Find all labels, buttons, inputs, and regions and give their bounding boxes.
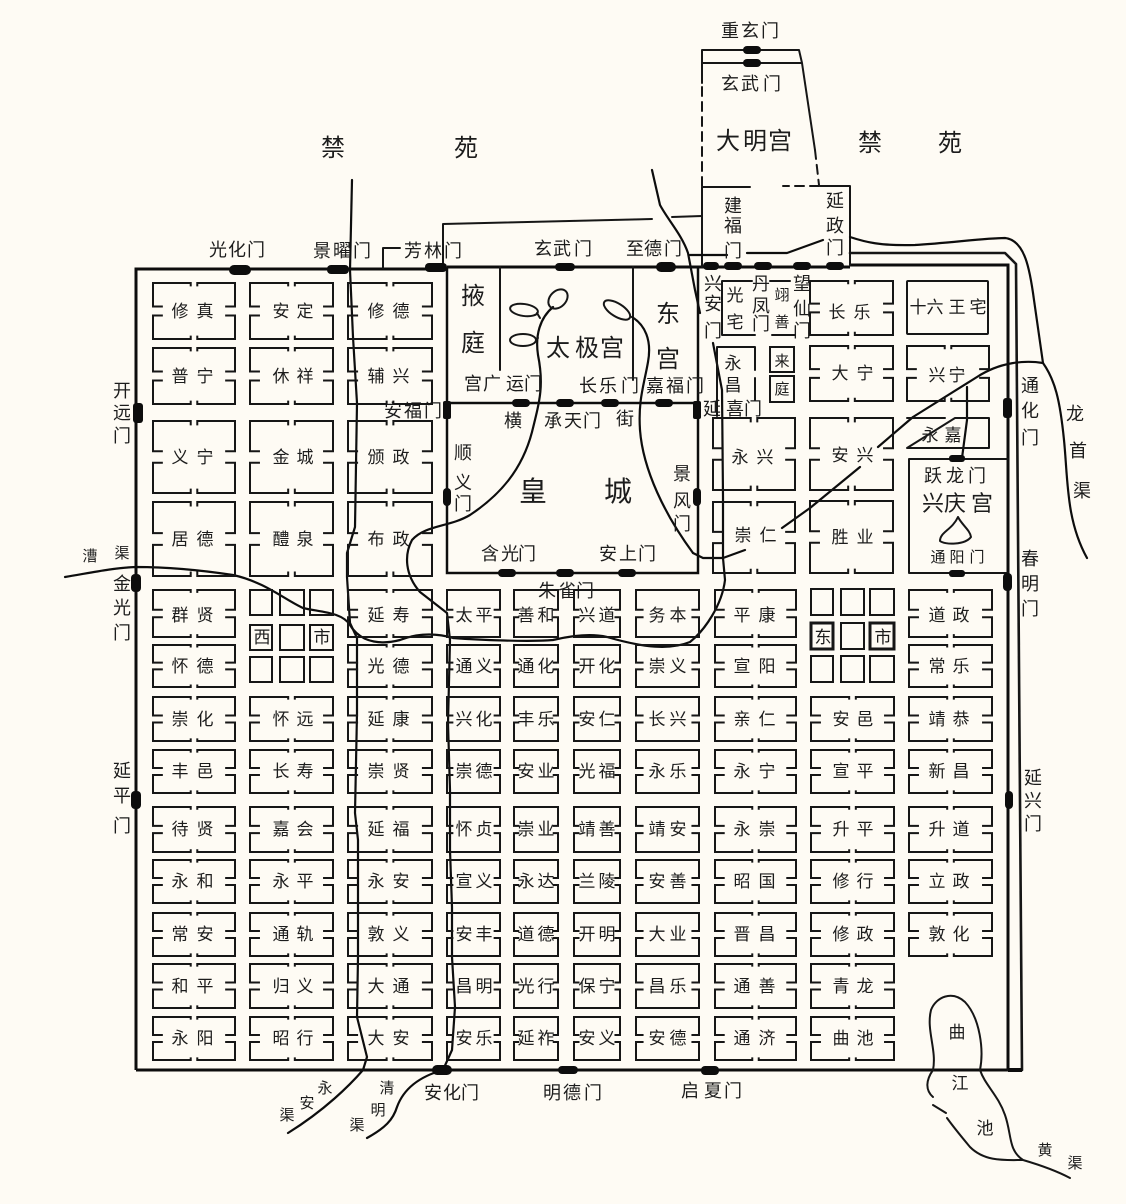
ward: 永昌: [717, 347, 755, 416]
ward: 崇业: 崇业: [518, 820, 554, 839]
ward: 升平: [811, 807, 894, 852]
ward: 崇贤: [348, 750, 432, 793]
ward: 永达: [514, 860, 558, 903]
ward: 光宅: [722, 281, 755, 335]
label: 宫广运门: 宫广运门: [464, 374, 542, 394]
label: 东宫: 东宫: [656, 301, 680, 373]
ward: 永和: 永和: [172, 872, 214, 891]
ward: 修德: [348, 283, 432, 339]
ward: 永和: [153, 860, 235, 903]
ward: 延寿: 延寿: [368, 606, 410, 625]
ward: 光行: 光行: [518, 977, 554, 996]
ward: 永宁: 永宁: [734, 762, 776, 781]
ward: 大通: [348, 964, 432, 1008]
label: 延喜门: 延喜门: [703, 399, 762, 419]
east market: [811, 589, 894, 682]
ward: 靖恭: [909, 697, 992, 741]
ward: 怀德: 怀德: [172, 657, 214, 676]
ward: 保宁: [574, 964, 620, 1008]
label: 漕渠: 漕渠: [82, 545, 130, 565]
ward: 靖善: 靖善: [578, 820, 616, 839]
ward: 醴泉: [250, 502, 333, 576]
label: 安福门: 安福门: [384, 401, 442, 421]
ward: 太平: 太平: [456, 606, 492, 625]
ward: 晋昌: 晋昌: [734, 925, 776, 944]
ward: 常安: 常安: [172, 925, 214, 944]
ward: 安业: [514, 750, 558, 793]
ward: 永兴: [713, 418, 795, 490]
ward: 昭国: 昭国: [734, 872, 776, 891]
ward: 崇仁: [713, 502, 795, 573]
ward: 务本: [636, 590, 699, 637]
ward: 休祥: [250, 348, 333, 404]
ward: 普宁: [153, 348, 235, 404]
ward: 怀贞: 怀贞: [456, 820, 492, 839]
label: 太极宫: 太极宫: [546, 335, 624, 362]
ward: 靖安: [636, 807, 699, 852]
ward: 永平: [250, 860, 333, 903]
palace: 兴庆宫: [922, 466, 993, 566]
label: 金光门: 金光门: [113, 574, 131, 643]
ward: 休祥: 休祥: [272, 367, 314, 386]
ward: 安义: [574, 1017, 620, 1060]
ward: 翊善: [770, 281, 795, 335]
ward: 宣义: 宣义: [456, 872, 492, 891]
ward: 长兴: [636, 697, 699, 741]
ward: 通化: [514, 645, 558, 687]
gates: [131, 46, 1013, 1075]
ward: 归义: 归义: [272, 977, 314, 996]
ward: 颁政: 颁政: [368, 448, 410, 467]
ward: 常安: [153, 913, 235, 956]
ward: 修德: 修德: [368, 302, 410, 321]
label: 春明门: 春明门: [1021, 549, 1039, 619]
ward: 安德: [636, 1017, 699, 1060]
label: 玄武门: 玄武门: [534, 239, 592, 259]
ward: 道德: 道德: [518, 925, 554, 944]
label: 含光门: 含光门: [481, 544, 536, 564]
ward: 安善: [636, 860, 699, 903]
ward: 崇化: [153, 697, 235, 741]
palace: 兴庆宫: 兴庆宫: [922, 491, 993, 516]
label: 望仙门: 望仙门: [793, 274, 811, 341]
ward: 昌乐: 昌乐: [648, 977, 686, 996]
ward: 怀贞: [447, 807, 500, 852]
ward: 待贤: [153, 807, 235, 852]
ward: 新昌: [909, 750, 992, 793]
label: 兴安门: 兴安门: [704, 274, 722, 341]
ward: 兴道: 兴道: [578, 606, 616, 625]
ward: 曲池: [811, 1017, 894, 1060]
ward: 平康: 平康: [734, 606, 776, 625]
ward: 大安: 大安: [368, 1029, 410, 1048]
ward: 修政: [811, 913, 894, 956]
ward: 开明: 开明: [578, 925, 616, 944]
ward: 辅兴: [348, 348, 432, 404]
ward: 修政: 修政: [832, 925, 874, 944]
ward: 永崇: [715, 807, 796, 852]
ward: 晋昌: [715, 913, 796, 956]
ward: 靖安: 靖安: [648, 820, 686, 839]
ward: 宣阳: 宣阳: [734, 657, 776, 676]
ward: 丰乐: [514, 697, 558, 741]
label: 重玄门: 重玄门: [721, 21, 779, 41]
ward: 曲池: 曲池: [832, 1029, 874, 1048]
ward: 昭国: [715, 860, 796, 903]
label: 通化门: 通化门: [1021, 376, 1039, 448]
ward: 通轨: 通轨: [272, 925, 314, 944]
ward: 延福: 延福: [368, 820, 410, 839]
ward: 兰陵: 兰陵: [578, 872, 616, 891]
ward: 怀远: [250, 697, 333, 741]
ward: 延康: 延康: [368, 710, 410, 729]
ward: 安义: 安义: [578, 1029, 616, 1048]
label: 启夏门: 启夏门: [681, 1081, 742, 1101]
ward: 开明: [574, 913, 620, 956]
ward: 升道: 升道: [928, 820, 970, 839]
ward: 和平: [153, 964, 235, 1008]
ward: 归义: [250, 964, 333, 1008]
ward: 安丰: 安丰: [456, 925, 492, 944]
label: 龙首渠: 龙首渠: [1066, 404, 1091, 501]
ward: 长乐: [810, 281, 893, 335]
ward: 青龙: 青龙: [832, 977, 874, 996]
ward: 待贤: 待贤: [172, 820, 214, 839]
ward: 普宁: 普宁: [172, 367, 214, 386]
palace: 兴庆宫: 跃龙门: [924, 466, 986, 486]
ward: 开化: 开化: [578, 657, 616, 676]
ward: 永兴: 永兴: [732, 448, 774, 467]
ward: 嘉会: 嘉会: [272, 820, 314, 839]
ward: 义宁: 义宁: [172, 448, 214, 467]
ward: 修行: 修行: [832, 872, 874, 891]
ward: 群贤: 群贤: [172, 606, 214, 625]
ward: 敦义: 敦义: [368, 925, 410, 944]
ward: 安兴: [810, 418, 893, 490]
ward: 兰陵: [574, 860, 620, 903]
ward: 居德: [153, 502, 235, 576]
label: 明德门: 明德门: [543, 1083, 602, 1103]
ward: 永嘉: 永嘉: [922, 426, 962, 445]
ward: 安善: 安善: [648, 872, 686, 891]
ward: 延福: [348, 807, 432, 852]
ward: 居德: 居德: [172, 530, 214, 549]
ward: 金城: 金城: [272, 448, 314, 467]
ward: 靖善: [574, 807, 620, 852]
ward: 大宁: 大宁: [832, 364, 874, 383]
ward: 修真: 修真: [172, 302, 214, 321]
east market: 东市: [814, 628, 892, 647]
ward: 丰邑: [153, 750, 235, 793]
ward: 通化: 通化: [518, 657, 554, 676]
ward: 兴宁: [907, 346, 989, 401]
ward: 丰邑: 丰邑: [172, 762, 214, 781]
west market: 西市: [254, 628, 330, 647]
ward: 昭行: [250, 1017, 333, 1060]
ward: 安定: 安定: [272, 302, 314, 321]
label: 景风门: 景风门: [673, 464, 691, 534]
label: 承天门: 承天门: [544, 411, 601, 431]
ward: 安乐: 安乐: [456, 1029, 492, 1048]
ward: 崇仁: 崇仁: [734, 526, 776, 545]
ward: 安兴: 安兴: [832, 446, 874, 465]
ward: 大通: 大通: [368, 977, 410, 996]
ward: 敦义: [348, 913, 432, 956]
label: 永安渠: 永安渠: [279, 1080, 333, 1124]
ward: 善和: 善和: [518, 606, 554, 625]
label: 皇城: 皇城: [519, 476, 632, 507]
ward: 永安: 永安: [368, 872, 410, 891]
ward: 通济: 通济: [734, 1029, 776, 1048]
ward: 兴道: [574, 590, 620, 637]
ward: 崇业: [514, 807, 558, 852]
ward: 怀远: 怀远: [272, 710, 314, 729]
ward: 翊善: 翊善: [774, 287, 790, 331]
ward: 宣平: 宣平: [832, 762, 874, 781]
ward: 立政: [909, 860, 992, 903]
ward: 道德: [514, 913, 558, 956]
ward: 保宁: 保宁: [578, 977, 616, 996]
ward: 长寿: [250, 750, 333, 793]
ward: 和平: 和平: [172, 977, 214, 996]
ward: 敦化: 敦化: [928, 925, 970, 944]
label: 顺义门: 顺义门: [454, 443, 472, 514]
ward: 来庭: [770, 347, 794, 402]
ward: 延祚: 延祚: [518, 1029, 554, 1048]
ward: 延祚: [514, 1017, 558, 1060]
label: 清明渠: 清明渠: [349, 1080, 395, 1134]
ward: 光德: 光德: [368, 657, 410, 676]
ward: 安乐: [447, 1017, 500, 1060]
ward: 永昌: 永昌: [724, 354, 742, 395]
ward: 长兴: 长兴: [648, 710, 686, 729]
ward: 昌明: [447, 964, 500, 1008]
ward: 永达: 永达: [518, 872, 554, 891]
label: 延兴门: 延兴门: [1024, 768, 1042, 834]
label: 景曜门: 景曜门: [313, 241, 371, 261]
ward: 永乐: 永乐: [648, 762, 686, 781]
label: 延平门: 延平门: [113, 761, 131, 836]
ward: 安仁: [574, 697, 620, 741]
ward: 兴化: [447, 697, 500, 741]
ward: 崇德: [447, 750, 500, 793]
ward: 升平: 升平: [832, 820, 874, 839]
ward: 亲仁: 亲仁: [734, 710, 776, 729]
ward: 通济: [715, 1017, 796, 1060]
ward: 兴化: 兴化: [456, 710, 492, 729]
ward: 永崇: 永崇: [734, 820, 776, 839]
ward: 安仁: 安仁: [578, 710, 616, 729]
ward: 延寿: [348, 590, 432, 637]
ward: 长寿: 长寿: [272, 762, 314, 781]
ward: 善和: [514, 590, 558, 637]
ward: 宣平: [811, 750, 894, 793]
ward: 光福: [574, 750, 620, 793]
ward: 安邑: 安邑: [832, 710, 874, 729]
ward: 胜业: [810, 501, 893, 573]
ward: 光福: 光福: [578, 762, 616, 781]
ward: 金城: [250, 421, 333, 493]
ward: 十六王宅: 十六王宅: [910, 298, 986, 317]
ward: 昌乐: [636, 964, 699, 1008]
ward: 永阳: [153, 1017, 235, 1060]
ward: 义宁: [153, 421, 235, 493]
ward: 通善: 通善: [734, 977, 776, 996]
ward: 光宅: 光宅: [726, 286, 744, 332]
heading: 禁苑 east: 禁苑: [858, 130, 962, 157]
ward: 道政: [909, 590, 992, 637]
ward: 光德: [348, 645, 432, 687]
ward: 永阳: 永阳: [172, 1029, 214, 1048]
ward: 胜业: 胜业: [832, 528, 874, 547]
canal: upper lines beside palace: [383, 216, 1087, 558]
label: 黄渠: 黄渠: [1037, 1142, 1083, 1172]
ward: 安丰: [447, 913, 500, 956]
heading: 禁苑 west: 禁苑: [321, 135, 478, 162]
ward: 通善: [715, 964, 796, 1008]
ward: 崇义: 崇义: [648, 657, 686, 676]
label: 延政门: 延政门: [826, 191, 844, 258]
lake Qujiang: [927, 996, 1070, 1178]
ward: 修行: [811, 860, 894, 903]
ward: 通义: 通义: [456, 657, 492, 676]
Daming Palace walls: [702, 50, 850, 267]
label: 安上门: 安上门: [599, 544, 656, 564]
city walls: [136, 253, 1022, 1070]
ward: 光行: [514, 964, 558, 1008]
label: 朱雀门: 朱雀门: [538, 581, 594, 601]
label: 曲江池: 曲江池: [948, 1023, 994, 1138]
label: 芳林门: 芳林门: [404, 241, 462, 261]
ward: 昭行: 昭行: [272, 1029, 314, 1048]
label: 至德门: 至德门: [626, 239, 682, 259]
ward: 大业: [636, 913, 699, 956]
ward: 大安: [348, 1017, 432, 1060]
ward: 永嘉: [907, 418, 989, 448]
ward: 群贤: [153, 590, 235, 637]
ward: 长乐: 长乐: [828, 303, 870, 322]
ward: 丰乐: 丰乐: [518, 710, 554, 729]
ward: 通轨: [250, 913, 333, 956]
ward: 安德: 安德: [648, 1029, 686, 1048]
canal: central canal east of palace: [65, 170, 725, 647]
label: 大明宫: 大明宫: [716, 128, 792, 155]
ward: 醴泉: 醴泉: [272, 530, 314, 549]
label: 长乐门: 长乐门: [579, 376, 639, 396]
ward: 立政: 立政: [928, 872, 970, 891]
ward: 十六王宅: [907, 281, 988, 334]
canal: Taiji palace east stream: [632, 317, 693, 553]
ward: 崇德: 崇德: [456, 762, 492, 781]
ward: 永乐: [636, 750, 699, 793]
ward: 兴宁: 兴宁: [928, 366, 966, 385]
label: 丹凤门: 丹凤门: [752, 274, 770, 334]
ward: 永宁: [715, 750, 796, 793]
ward: 怀德: [153, 645, 235, 687]
ward: 大业: 大业: [648, 925, 686, 944]
label: 开远门: 开远门: [113, 381, 131, 446]
ward: 布政: 布政: [368, 530, 410, 549]
ward: 安邑: [811, 697, 894, 741]
ward: 平康: [715, 590, 796, 637]
ward: 太平: [447, 590, 500, 637]
label: 安化门: 安化门: [424, 1083, 479, 1103]
ward: 升道: [909, 807, 992, 852]
ward: 务本: 务本: [648, 606, 686, 625]
west market: [250, 590, 333, 682]
label: 横街: 横街: [504, 409, 634, 431]
ward: 永安: [348, 860, 432, 903]
ward: 常乐: 常乐: [928, 657, 970, 676]
ward: 崇义: [636, 645, 699, 687]
ward: 道政: 道政: [928, 606, 970, 625]
ward: 昌明: 昌明: [456, 977, 492, 996]
ward: 修真: [153, 283, 235, 339]
label: 嘉福门: 嘉福门: [646, 376, 704, 396]
ward: 通义: [447, 645, 500, 687]
canal: west stream Yong'an: [288, 180, 367, 1133]
ward: 布政: [348, 502, 432, 576]
ward: 开化: [574, 645, 620, 687]
ward: 敦化: [909, 913, 992, 956]
ward: 宣阳: [715, 645, 796, 687]
ward: 新昌: 新昌: [928, 762, 970, 781]
ward: 靖恭: 靖恭: [928, 710, 970, 729]
ward: 永平: 永平: [272, 872, 314, 891]
label: 掖庭: 掖庭: [461, 283, 485, 357]
ward: 安定: [250, 283, 333, 339]
ward: 嘉会: [250, 807, 333, 852]
ponds of Taiji Palace: [509, 286, 633, 346]
ward: 崇贤: 崇贤: [368, 762, 410, 781]
ward: 来庭: 来庭: [774, 353, 790, 398]
label: 建福门: 建福门: [724, 196, 742, 261]
ward: 大宁: [810, 346, 893, 401]
canal: Taiji palace west stream: [367, 307, 553, 1138]
label: 玄武门 Daming: 玄武门: [721, 74, 781, 94]
ward: 亲仁: [715, 697, 796, 741]
ward: 辅兴: 辅兴: [368, 367, 410, 386]
ward: 延康: [348, 697, 432, 741]
ward: 青龙: [811, 964, 894, 1008]
canal: Longshou canal east branch: [693, 362, 1043, 558]
palace: 兴庆宫: 通阳门: [930, 549, 985, 566]
ward: 常乐: [909, 645, 992, 687]
ward: 颁政: [348, 421, 432, 493]
label: 光化门: 光化门: [209, 240, 265, 260]
ward: 宣义: [447, 860, 500, 903]
ward: 崇化: 崇化: [172, 710, 214, 729]
ward: 安业: 安业: [518, 762, 554, 781]
